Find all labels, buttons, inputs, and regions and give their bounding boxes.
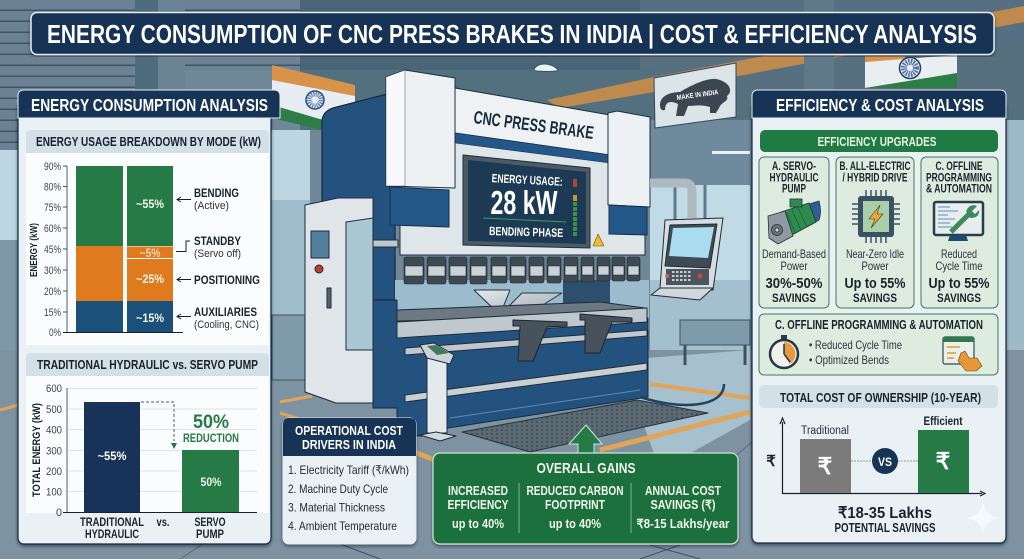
driver list bbox=[288, 463, 409, 533]
legend labels: POSITIONING bbox=[194, 273, 260, 287]
panel background bbox=[18, 100, 271, 544]
panel heading bbox=[283, 418, 416, 456]
gain: efficiency bbox=[448, 484, 509, 531]
gain: carbon: FOOTPRINT bbox=[545, 498, 605, 512]
watermark sparkle bbox=[966, 502, 1000, 534]
potential savings: POTENTIAL SAVINGS bbox=[834, 521, 936, 535]
x axis labels: vs. bbox=[156, 517, 170, 529]
bed rails bbox=[397, 302, 647, 418]
grid and axis: 200 bbox=[46, 466, 62, 478]
foot pedestal control bbox=[420, 343, 456, 441]
panel: efficiency and cost analysis bbox=[752, 90, 1006, 543]
stacked bar: by mode: ~25% bbox=[136, 274, 164, 286]
panel: operational cost drivers bbox=[283, 418, 416, 544]
y axis: 75% bbox=[44, 202, 61, 214]
sub-panel: energy usage breakdown bbox=[26, 130, 269, 345]
flag: India, left bbox=[272, 65, 355, 130]
bent sheet workpiece bbox=[474, 290, 562, 315]
x axis labels: SERVO bbox=[194, 517, 226, 529]
bar: traditional bbox=[800, 425, 851, 493]
bar: traditional hydraulic bbox=[84, 402, 140, 512]
bar: servo pump: 50% bbox=[200, 477, 222, 489]
gain: carbon: REDUCED CARBON bbox=[526, 484, 624, 498]
sub-panel: traditional vs servo bbox=[26, 353, 269, 541]
panel heading: OPERATIONAL COST bbox=[295, 423, 403, 438]
driver list: 4. Ambient Temperature bbox=[288, 519, 397, 533]
card C: offline programming: & AUTOMATION bbox=[926, 184, 992, 196]
bar: efficient bbox=[918, 416, 969, 493]
panel heading: ENERGY CONSUMPTION ANALYSIS bbox=[31, 95, 268, 115]
energy display screen bbox=[463, 155, 590, 248]
y axis: 45% bbox=[44, 244, 61, 256]
driver list: 1. Electricity Tariff (₹/kWh) bbox=[288, 463, 409, 477]
energy display screen: BENDING PHASE bbox=[489, 224, 563, 240]
y axis: 90% bbox=[44, 161, 61, 173]
stacked bar: by mode: ~5% bbox=[140, 248, 160, 260]
efficiency upgrades heading: EFFICIENCY UPGRADES bbox=[818, 134, 937, 149]
energy display screen: 28 kW bbox=[490, 184, 558, 221]
card A: servo-hydraulic pump: A. SERVO- bbox=[772, 161, 816, 173]
arrow: up to machine bbox=[569, 425, 602, 454]
floor mat bbox=[462, 400, 708, 452]
grid and axis: 300 bbox=[46, 446, 62, 458]
y axis: ENERGY (kW) bbox=[28, 223, 40, 277]
driver list: 3. Material Thickness bbox=[288, 500, 385, 514]
CNC control monitor bbox=[651, 218, 723, 300]
machine: central dark gap bbox=[563, 280, 610, 308]
offline programming strip: • Reduced Cycle Time bbox=[809, 338, 902, 352]
arrow: reduction bbox=[141, 402, 177, 449]
y axis: 80% bbox=[44, 182, 61, 194]
card A: servo-hydraulic pump: Demand-Based bbox=[762, 247, 826, 261]
card B: all-electric hybrid drive: Near-Zero Idle bbox=[846, 247, 904, 261]
panel: overall gains bbox=[433, 453, 738, 544]
legend labels: BENDING bbox=[194, 186, 239, 200]
sheet supports bbox=[513, 314, 632, 361]
icon: software with hand bbox=[943, 337, 982, 371]
grid and axis: 100 bbox=[46, 486, 62, 498]
left electrical cabinet bbox=[305, 198, 398, 403]
potential savings: ₹18-35 Lakhs bbox=[838, 505, 932, 522]
sub-panel: energy usage breakdown: ENERGY USAGE BREAKDOWN BY MODE (kW) bbox=[36, 134, 261, 149]
card C: offline programming: PROGRAMMING bbox=[926, 172, 992, 184]
gain: efficiency: INCREASED bbox=[448, 484, 508, 498]
gain: savings bbox=[636, 484, 730, 531]
bar: traditional: ₹ bbox=[818, 453, 833, 479]
callout: 50% reduction: REDUCTION bbox=[183, 433, 239, 445]
hydraulic pipe to control arm bbox=[650, 183, 692, 218]
CNC press brake machine bbox=[305, 70, 724, 452]
x axis labels bbox=[80, 517, 226, 541]
y axis bbox=[28, 161, 183, 339]
grid and axis: 500 bbox=[46, 404, 62, 416]
gain: savings: ₹8-15 Lakhs/year bbox=[636, 517, 730, 531]
bar: servo pump bbox=[182, 450, 239, 512]
card B: all-electric hybrid drive: SAVINGS bbox=[853, 291, 897, 305]
card A: servo-hydraulic pump: PUMP bbox=[782, 184, 806, 196]
machine: right column bbox=[608, 111, 650, 235]
machine: rear blue frame bbox=[322, 92, 395, 300]
panel heading: OVERALL GAINS bbox=[536, 460, 636, 477]
callout: 50% reduction bbox=[183, 412, 239, 445]
panel background bbox=[752, 100, 1006, 543]
card A: servo-hydraulic pump: 30%-50% bbox=[766, 276, 823, 292]
gain: savings: ANNUAL COST bbox=[645, 484, 721, 498]
card C: offline programming: SAVINGS bbox=[937, 291, 981, 305]
potential savings bbox=[834, 505, 936, 535]
panel heading bbox=[18, 90, 280, 118]
warning triangle bbox=[593, 234, 604, 246]
panel heading: DRIVERS IN INDIA bbox=[302, 437, 397, 452]
ceiling lamp bbox=[534, 64, 558, 72]
card A: servo-hydraulic pump bbox=[759, 157, 829, 308]
stacked bar: by mode bbox=[127, 166, 173, 332]
icon: chip with lightning bolt bbox=[852, 190, 900, 243]
stacked bar: by mode: ~15% bbox=[136, 313, 164, 325]
icon: servo pump motor bbox=[768, 199, 820, 244]
card C: offline programming bbox=[921, 157, 998, 308]
y axis: 30% bbox=[44, 265, 61, 277]
card C: offline programming: C. OFFLINE bbox=[936, 161, 983, 173]
x axis labels: TRADITIONAL bbox=[80, 517, 144, 529]
chart axes bbox=[780, 418, 985, 496]
card B: all-electric hybrid drive: B. ALL-ELECTRIC bbox=[840, 161, 910, 173]
machine: left column bbox=[386, 70, 455, 227]
card A: servo-hydraulic pump: HYDRAULIC bbox=[770, 172, 818, 184]
machine: lower window area bbox=[395, 280, 649, 330]
machine label: CNC PRESS BRAKE bbox=[472, 107, 595, 143]
panel heading bbox=[752, 90, 1006, 118]
gain: efficiency: up to 40% bbox=[452, 517, 504, 531]
grid and axis: TOTAL ENERGY (kW) bbox=[31, 403, 43, 497]
x axis labels: HYDRAULIC bbox=[85, 529, 139, 541]
gain: carbon: up to 40% bbox=[549, 517, 601, 531]
y axis: 20% bbox=[44, 286, 61, 298]
legend labels: (Active) bbox=[194, 200, 229, 212]
stacked bar: by mode: ~55% bbox=[136, 199, 164, 211]
legend labels: STANDBY bbox=[194, 234, 241, 248]
panel background bbox=[283, 418, 416, 544]
power cable bbox=[640, 384, 724, 405]
icon: stopwatch bbox=[770, 335, 798, 368]
bar: efficient: Efficient bbox=[924, 416, 963, 428]
machine: main white panel bbox=[400, 135, 645, 255]
card A: servo-hydraulic pump: Power bbox=[780, 259, 808, 273]
callout: 50% reduction: 50% bbox=[193, 412, 229, 433]
card C: offline programming: Reduced bbox=[941, 247, 977, 261]
grid and axis bbox=[31, 383, 257, 519]
y axis: 15% bbox=[44, 307, 61, 319]
x axis labels: PUMP bbox=[196, 529, 224, 541]
sign: Make in India: MAKE IN INDIA bbox=[676, 89, 719, 102]
card B: all-electric hybrid drive: / HYBRID DRIVE bbox=[842, 172, 908, 184]
vs badge: VS bbox=[878, 455, 892, 469]
sign: Make in India bbox=[654, 63, 736, 128]
grid and axis: 600 bbox=[46, 383, 62, 395]
legend labels bbox=[194, 186, 260, 331]
vs badge bbox=[851, 448, 918, 474]
y axis: 0% bbox=[49, 327, 61, 339]
driver list: 2. Machine Duty Cycle bbox=[288, 482, 388, 496]
lower blue body bbox=[373, 300, 648, 436]
offline programming strip bbox=[759, 314, 998, 375]
card C: offline programming: Up to 55% bbox=[928, 276, 990, 292]
title banner bbox=[31, 12, 994, 54]
card B: all-electric hybrid drive: Power bbox=[862, 259, 889, 273]
bar: traditional hydraulic: ~55% bbox=[98, 451, 126, 463]
grid and axis: 0 bbox=[56, 507, 62, 519]
grid and axis: 400 bbox=[46, 424, 62, 436]
tool clamps row bbox=[404, 257, 640, 284]
total cost of ownership bbox=[759, 385, 998, 535]
gain: savings: SAVINGS (₹) bbox=[650, 498, 716, 512]
gain: carbon bbox=[526, 484, 624, 531]
legend labels: (Servo off) bbox=[194, 248, 241, 260]
sub-panel: traditional vs servo: TRADITIONAL HYDRAULIC vs. SERVO PUMP bbox=[37, 357, 258, 372]
legend labels: (Cooling, CNC) bbox=[194, 319, 259, 331]
card B: all-electric hybrid drive bbox=[836, 157, 914, 308]
energy display screen: ENERGY USAGE: bbox=[491, 171, 563, 189]
bar: efficient: ₹ bbox=[936, 448, 951, 474]
dividers bbox=[519, 483, 631, 533]
panel background bbox=[433, 453, 738, 544]
card C: offline programming: Cycle Time bbox=[936, 259, 983, 273]
card A: servo-hydraulic pump: SAVINGS bbox=[772, 291, 816, 305]
card B: all-electric hybrid drive: Up to 55% bbox=[844, 276, 906, 292]
bar: traditional: Traditional bbox=[801, 425, 849, 437]
efficiency upgrades heading bbox=[760, 130, 998, 152]
panel: energy consumption analysis bbox=[18, 90, 280, 544]
machine: upper beam bbox=[455, 88, 610, 155]
stacked bar: total bbox=[76, 166, 123, 332]
flag: India, right bbox=[865, 55, 957, 88]
offline programming strip: • Optimized Bends bbox=[809, 353, 889, 367]
legend labels: AUXILIARIES bbox=[194, 305, 257, 319]
machine: beam blue stripe bbox=[455, 133, 610, 163]
axis currency symbol: ₹ bbox=[766, 453, 776, 470]
icon: monitor with wrench bbox=[934, 202, 983, 241]
legend arrows bbox=[176, 197, 191, 319]
y axis: 60% bbox=[44, 223, 61, 235]
gain: efficiency: EFFICIENCY bbox=[448, 498, 509, 512]
